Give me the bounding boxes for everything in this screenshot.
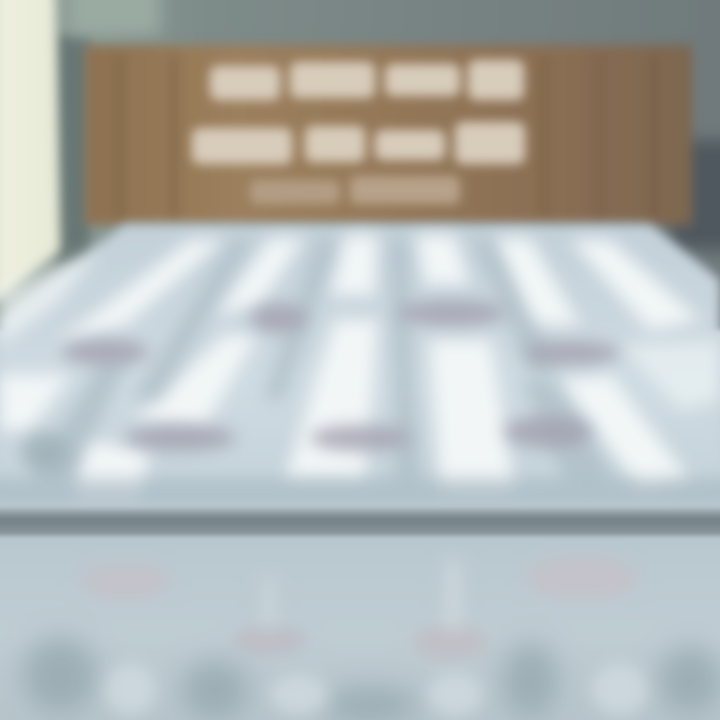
mattress edge piping	[0, 508, 720, 536]
front panel tufts	[79, 556, 638, 659]
tufted buttons	[21, 300, 620, 472]
shaded quilting channels	[0, 240, 720, 508]
quilted white stripes	[0, 235, 720, 495]
front panel highlights	[104, 664, 648, 717]
headboard	[85, 45, 692, 225]
headboard panel lines	[115, 55, 658, 220]
front panel shadows	[22, 637, 720, 720]
mattress top surface	[0, 224, 720, 515]
mattress front panel	[0, 530, 720, 720]
blurred headboard lettering	[192, 60, 525, 204]
window curtain	[0, 0, 60, 300]
background wall	[0, 0, 720, 330]
